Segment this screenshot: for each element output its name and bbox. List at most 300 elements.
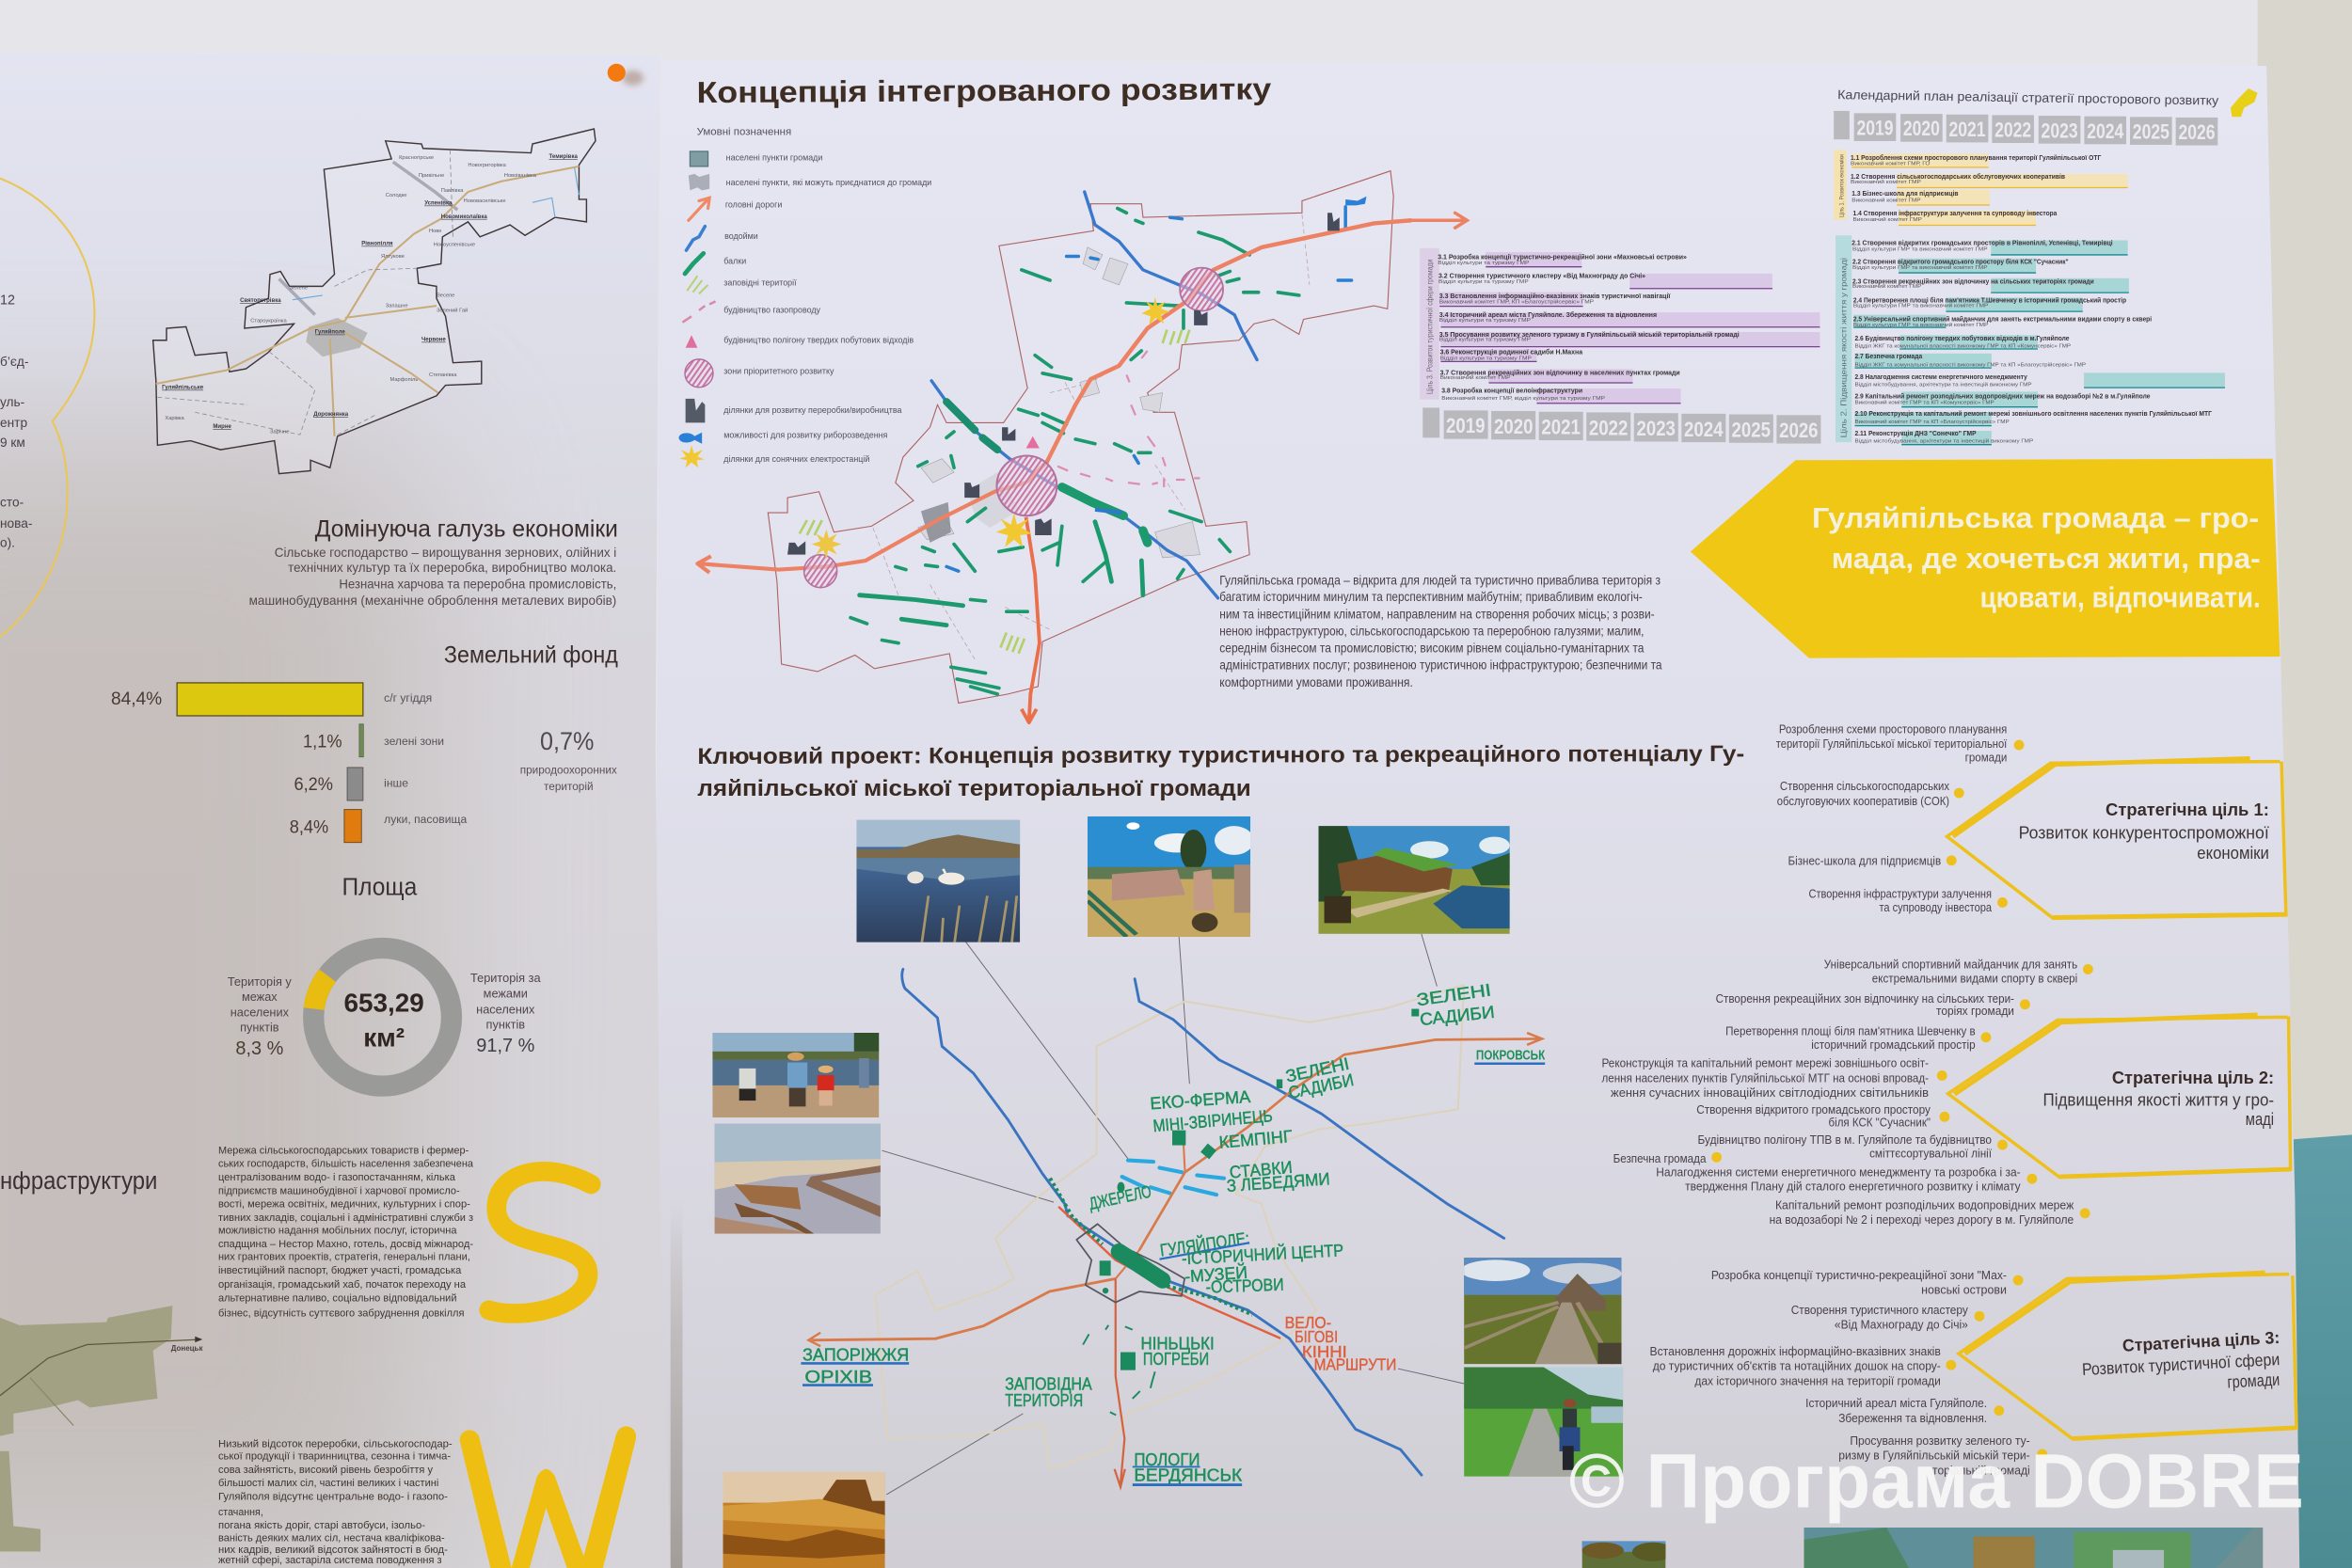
gantt chart: goals 1 and 2: Виконавчий комітет ГМР та КП «Благоустрійсервіс» ГМР xyxy=(1854,419,2010,425)
list: goal 3 projects: «Від Махнограду до Січі» xyxy=(1835,1319,1968,1332)
text block: territory outside settlements: пунктів xyxy=(486,1017,525,1031)
text block: dominant economy description: машинобудування (механічне оброблення металевих виробів) xyxy=(249,593,616,608)
gantt chart: goal 3 tourism: 3.4 Історичний ареал міста Гуляйполе. Збереження та відновлення xyxy=(1439,311,1657,319)
list: goal 1 projects: Бізнес-школа для підприємців xyxy=(1788,855,1942,868)
text block: weaknesses xyxy=(218,1439,453,1566)
text block: territory within settlements: 8,3 % xyxy=(235,1038,283,1059)
map: hand-drawn tourism sketch map: ЗАПОРІЖЖЯ xyxy=(803,1344,909,1364)
legend: map symbols: балки xyxy=(723,256,746,265)
gantt chart: goals 1 and 2 xyxy=(1834,111,2225,445)
photo: bench on a pier xyxy=(715,1123,881,1234)
gantt chart: goal 3 tourism: 2024 xyxy=(1684,418,1724,441)
gantt chart: goals 1 and 2: Відділ культури ГМР та виконавчий комітет ГМР xyxy=(1853,302,1988,309)
panel: left poster sheet xyxy=(0,261,671,1568)
gantt chart: goals 1 and 2: 2.10 Реконструкція та капітальний ремонт мережі зовнішнього освітлення населених пунктів Гуляйпільської МТГ xyxy=(1854,410,2212,418)
heading: land fund: Земельний фонд xyxy=(444,642,618,668)
heading: key project xyxy=(697,741,1744,801)
text block: strengths: можливістю надання мобільних послуг, історична xyxy=(218,1226,457,1237)
list: goal 2 projects: Перетворення площі біля пам'ятника Шевченку в xyxy=(1725,1024,1976,1037)
gantt chart: goal 3 tourism: Виконавчий комітет ГМР xyxy=(1440,374,1511,381)
letter S for strengths xyxy=(489,1171,591,1313)
map: hand-drawn tourism sketch map: ЕКО-ФЕРМА xyxy=(1150,1086,1251,1113)
list: goal 1 projects: громади xyxy=(1965,752,2007,765)
map: community districts and settlements: Павлівка xyxy=(441,188,464,194)
list: goal 2 projects: Універсальний спортивний майданчик для занять xyxy=(1824,958,2077,972)
gantt chart: goals 1 and 2: 1.2 Створення сільськогосподарських обслуговуючих кооперативів xyxy=(1851,173,2066,181)
list: goal 1 projects: Створення інфраструктури залучення xyxy=(1809,888,1992,901)
decorative yellow outline with profile text fragments xyxy=(0,179,94,637)
text block: dominant economy description: технічних культур та їх переробка, виробництво молока. xyxy=(288,560,616,575)
list: goal 3 projects: дах історичного значення на території громади xyxy=(1694,1375,1941,1388)
list: goal 3 projects: торіальній громаді xyxy=(1932,1465,2030,1478)
donut chart: area 653,29 km2: 653,29 xyxy=(344,989,424,1018)
gantt chart: goal 3 tourism: 2020 xyxy=(1494,415,1533,438)
panel: strategic goal 2 xyxy=(1948,1015,2291,1177)
bar chart: land fund: 8,4% xyxy=(290,817,328,837)
decorative yellow outline with profile text fragments: ентр xyxy=(0,416,27,430)
map: hand-drawn tourism sketch map: НІНЬЦЬКІ xyxy=(1141,1333,1215,1353)
map: hand-drawn tourism sketch map: З ЛЕБЕДЯМИ xyxy=(1226,1168,1330,1196)
map: community districts and settlements: Новоіванівка xyxy=(504,173,537,179)
gantt chart: goals 1 and 2: Відділ ЖКГ та комунальної власності виконкому ГМР та КП «Комунсервіс» ГМР xyxy=(1854,344,2071,350)
icon: yellow push pin xyxy=(2231,88,2258,117)
gantt chart: goal 3 tourism xyxy=(1420,248,1820,444)
decorative yellow outline with profile text fragments: о). xyxy=(0,536,15,550)
text block: strengths: спадщина – Нестор Махно, готель, досвід міжнарод- xyxy=(218,1239,473,1250)
text block: vision statement: ним та інвестиційним кліматом, направленим на створення робочих місць; з розви- xyxy=(1219,607,1655,621)
text block: vision statement: багатим історичним минулим та перспективним майбутнім; привабливим екологіч- xyxy=(1219,590,1643,604)
map: community districts and settlements: Новогригорівка xyxy=(468,163,507,168)
map: community districts and settlements: Красногірське xyxy=(399,155,434,161)
text block: strengths: бізнес, відсутність суттєвого забруднення довкілля xyxy=(218,1307,464,1319)
stat: protected territories: 0,7% xyxy=(540,726,594,755)
list: goal 1 projects xyxy=(1776,722,2024,914)
photo: cows at eco farm xyxy=(1088,816,1251,937)
text block: territory outside settlements: 91,7 % xyxy=(476,1036,534,1056)
panel: strategic goal 3: Стратегічна ціль 3: xyxy=(2122,1328,2280,1355)
text block: strengths: альтернативне паливо, соціально відповідальний xyxy=(218,1292,456,1304)
list: goal 2 projects: на водозаборі № 2 і переході через дорогу в м. Гуляйполе xyxy=(1770,1213,2074,1227)
legend: map symbols xyxy=(678,126,931,467)
list: goal 3 projects: новські острови xyxy=(1921,1283,2007,1296)
icon: orange push pin xyxy=(608,64,644,86)
map: hand-drawn tourism sketch map: СТАВКИ xyxy=(1229,1157,1293,1182)
gantt chart: goals 1 and 2: 2.11 Реконструкція ДНЗ "Сонечко" ГМР xyxy=(1854,430,1977,437)
arrow banner: community slogan: цювати, відпочивати. xyxy=(1980,582,2261,613)
map: community districts and settlements: Новоуспенівське xyxy=(434,242,475,247)
text block: dominant economy description: Незначна харчова та переробна промисловість, xyxy=(339,577,616,592)
text block: weaknesses: жетній сфері, застаріла система поводження з xyxy=(218,1555,442,1566)
legend: map symbols: можливості для розвитку риборозведення xyxy=(723,430,888,439)
gantt chart: goal 3 tourism: 2025 xyxy=(1732,418,1771,441)
map: community districts and settlements: Святопетрівка xyxy=(240,298,281,304)
legend: map symbols: населені пункти громади xyxy=(726,153,822,163)
list: goal 3 projects: Розробка концепції туристично-рекреаційної зони "Мах- xyxy=(1711,1269,2007,1282)
gantt chart: goals 1 and 2: 2026 xyxy=(2178,120,2216,144)
map: hand-drawn tourism sketch map: КІННІ xyxy=(1302,1342,1347,1361)
gantt chart: goals 1 and 2: 2.8 Налагодження системи енергетичного менеджменту xyxy=(1854,373,2027,381)
gantt chart: goals 1 and 2: 2.7 Безпечна громада xyxy=(1854,353,1923,360)
map: hand-drawn tourism sketch map: ПОГРЕБИ xyxy=(1143,1349,1209,1369)
gantt chart: goals 1 and 2: Відділ ЖКГ та комунальної власності виконкому ГМР та КП «Благоустрійсервіс» ГМР xyxy=(1854,362,2086,369)
list: goal 3 projects: Встановлення дорожніх інформаційно-вказівних знаків xyxy=(1650,1345,1941,1358)
gantt chart: goals 1 and 2: Виконавчий комітет ГМР xyxy=(1853,216,1922,223)
gantt chart: goals 1 and 2: 2024 xyxy=(2087,119,2124,143)
gantt chart: goal 3 tourism: Відділ культури та туризму ГМР xyxy=(1439,318,1531,324)
map: hand-drawn tourism sketch map: ОРІХІВ xyxy=(804,1367,872,1386)
stat: protected territories: територій xyxy=(544,781,594,793)
map: community districts and settlements: Харівка xyxy=(165,416,184,421)
list: goal 2 projects xyxy=(1601,958,2093,1227)
gantt chart: goal 3 tourism: 3.5 Просування розвитку зеленого туризму в Гуляйпільській міській територіальній громаді xyxy=(1439,331,1740,339)
map: community districts and settlements: Дорожнянка xyxy=(313,412,349,418)
map: hand-drawn tourism sketch map: МІНІ-ЗВІРИНЕЦЬ xyxy=(1152,1105,1273,1135)
text block: territory within settlements: пунктів xyxy=(240,1020,279,1034)
panel: strategic goal 2: Стратегічна ціль 2: xyxy=(2112,1069,2274,1087)
bar chart: land fund: інше xyxy=(384,777,408,790)
heading: calendar plan: Календарний план реалізації стратегії просторового розвитку xyxy=(1837,87,2218,108)
heading: infrastructure fragment: нфраструктури xyxy=(0,1168,157,1195)
map: community districts and settlements: Степанівка xyxy=(429,372,457,378)
gantt chart: goals 1 and 2: 2.5 Універсальний спортивний майданчик для занять екстремальними видами спорту в сквері xyxy=(1853,316,2152,324)
map: community districts and settlements: Ялтукове xyxy=(381,254,405,260)
text block: strengths: них грантових проектів, стратегія, генеральні плани, xyxy=(218,1251,470,1262)
panel: strategic goal 2: маді xyxy=(2246,1110,2274,1129)
map: hand-drawn tourism sketch map: САДИБИ xyxy=(1287,1069,1356,1102)
map: hand-drawn tourism sketch map: -ІСТОРИЧНИЙ ЦЕНТР xyxy=(1182,1240,1344,1268)
gantt chart: goals 1 and 2: 2021 xyxy=(1949,118,1986,141)
panel: centre poster sheet xyxy=(654,60,2299,1568)
gantt chart: goal 3 tourism: 3.2 Створення туристичного кластеру «Від Махнограду до Січі» xyxy=(1438,272,1645,279)
watermark: © Програма DOBRE xyxy=(1569,1438,2304,1524)
bar chart: land fund: зелені зони xyxy=(384,735,444,748)
decorative yellow outline with profile text fragments: 12 xyxy=(0,293,15,309)
list: goal 2 projects: Безпечна громада xyxy=(1613,1152,1707,1165)
map: hand-drawn tourism sketch map xyxy=(801,969,1545,1487)
list: goal 2 projects: Капітальний ремонт розподільчих водопровідних мереж xyxy=(1775,1198,2074,1212)
list: goal 3 projects: ризму в Гуляйпільській міській тери- xyxy=(1838,1449,2030,1463)
decorative yellow outline with profile text fragments: нова- xyxy=(0,516,32,531)
map: regional silhouette with Donetsk road: Донецьк xyxy=(171,1344,202,1353)
gantt chart: goals 1 and 2: Ціль 2. Підвищення якості життя у громаді xyxy=(1840,258,1849,437)
gantt chart: goal 3 tourism: 3.3 Встановлення інформаційно-вказівних знаків туристичної навігації xyxy=(1439,293,1671,300)
donut chart: area 653,29 km2: км² xyxy=(363,1022,405,1052)
gantt chart: goals 1 and 2: 2.6 Будівництво полігону твердих побутових відходів в м.Гуляйполе xyxy=(1854,335,2069,342)
bar chart: land fund: с/г угіддя xyxy=(384,691,432,705)
gantt chart: goals 1 and 2: 1.1 Розроблення схеми просторового планування території Гуляйпільської ОТГ xyxy=(1851,154,2101,162)
legend: map symbols: будівництво газопроводу xyxy=(723,305,821,314)
text block: vision statement: комфортними умовами проживання. xyxy=(1219,675,1413,689)
map: hand-drawn tourism sketch map: БЕРДЯНСЬК xyxy=(1134,1465,1242,1485)
gantt chart: goals 1 and 2: 2025 xyxy=(2133,120,2169,144)
panel: strategic goal 1: економіки xyxy=(2197,844,2269,863)
map: community districts and settlements: Марфопіль xyxy=(390,377,418,383)
photo: wooden cabin by a pond xyxy=(1319,826,1510,934)
text block: strengths: вості, мережа освітніх, медичних, культурних і спор- xyxy=(218,1199,470,1211)
panel: strategic goal 3: Розвиток туристичної сфери xyxy=(2082,1350,2280,1379)
donut chart: area 653,29 km2 xyxy=(313,948,452,1086)
text block: territory within settlements xyxy=(228,974,292,1059)
gantt chart: goals 1 and 2: Відділ культури ГМР та виконавчий комітет ГМР xyxy=(1852,246,1988,253)
text block: vision statement: адміністративних послуг; розвиненою туристичною інфраструктурою; безпечними та xyxy=(1219,658,1662,673)
legend: map symbols: будівництво полігону твердих побутових відходів xyxy=(723,336,914,345)
map: community districts and settlements: Рівнопілля xyxy=(361,242,393,247)
arrow banner: community slogan xyxy=(1691,459,2280,658)
gantt chart: goal 3 tourism: 3.8 Розробка концепції велоінфраструктури xyxy=(1441,388,1582,395)
map: integrated development concept xyxy=(697,171,1467,722)
text block: territory outside settlements: населених xyxy=(476,1002,535,1016)
text block: territory outside settlements xyxy=(470,971,541,1056)
gantt chart: goals 1 and 2: Відділ містобудування, архітектури та інвестицій виконкому ГМР xyxy=(1854,437,2033,444)
bar chart: land fund: луки, пасовища xyxy=(384,813,467,826)
map: community districts and settlements: Запашне xyxy=(386,304,408,309)
gantt chart: goal 3 tourism: Відділ культури та туризму ГМР xyxy=(1438,261,1530,266)
arrow banner: community slogan: Гуляйпільська громада – гро- xyxy=(1812,503,2259,534)
map: hand-drawn tourism sketch map: САДИБИ xyxy=(1419,1002,1496,1029)
gantt chart: goal 3 tourism: Виконавчий комітет ГМР, відділ культури та туризму ГМР xyxy=(1441,395,1605,402)
text block: territory within settlements: населених xyxy=(230,1006,290,1020)
map: community districts and settlements: Староукраїнка xyxy=(250,319,288,325)
text block: dominant economy description: Сільське господарство – вирощування зернових, олійних і xyxy=(275,545,616,560)
gantt chart: goals 1 and 2: Виконавчий комітет ГМР xyxy=(1852,283,1921,290)
gantt chart: goal 3 tourism: 3.1 Розробка концепції туристично-рекреаційної зони «Махновські острови» xyxy=(1438,253,1687,261)
photo: boardwalk with thatched hut xyxy=(1464,1258,1622,1364)
panel: strategic goal 2: Підвищення якості життя у гро- xyxy=(2043,1090,2274,1109)
gantt chart: goal 3 tourism: 2019 xyxy=(1446,414,1485,437)
text block: weaknesses: більшості малих сіл, частині великих і частині xyxy=(218,1478,438,1489)
text block: dominant economy description xyxy=(249,545,616,608)
bar chart: land fund xyxy=(111,683,467,843)
list: goal 3 projects: Створення туристичного кластеру xyxy=(1791,1304,1969,1317)
photo: children running on the embankment xyxy=(712,1033,879,1117)
map: community districts and settlements: Зелене xyxy=(290,286,308,292)
text block: territory outside settlements: межами xyxy=(484,987,528,1001)
list: goal 1 projects: Розроблення схеми просторового планування xyxy=(1779,722,2007,736)
gantt chart: goal 3 tourism: Відділ культури та туризму ГМР xyxy=(1438,279,1529,285)
panel: strategic goal 3: громади xyxy=(2227,1370,2280,1391)
text block: strengths xyxy=(218,1145,474,1319)
gantt chart: goals 1 and 2: Відділ культури ГМР та виконавчий комітет ГМР xyxy=(1853,322,1988,328)
text block: strengths: підприємств машинобудівної і харчової промисло- xyxy=(218,1185,460,1196)
list: goal 1 projects: та супроводу інвестора xyxy=(1879,901,1992,914)
gantt chart: goals 1 and 2: 2023 xyxy=(2042,119,2078,142)
list: goal 3 projects: Збереження та відновлення. xyxy=(1838,1412,1987,1425)
list: goal 2 projects: історичний громадський простір xyxy=(1811,1038,1976,1052)
map: community districts and settlements: Привільне xyxy=(419,173,444,179)
decorative yellow outline with profile text fragments: уль- xyxy=(0,395,24,409)
map: hand-drawn tourism sketch map: -ОСТРОВИ xyxy=(1205,1275,1284,1297)
photo: cyclist on a path xyxy=(1464,1368,1624,1477)
text block: weaknesses: ської продукції і тваринництва, сезонна і тимча- xyxy=(218,1450,451,1462)
list: goal 2 projects: Створення рекреаційних зон відпочинку на сільських тери- xyxy=(1716,992,2014,1006)
map: community districts and settlements: Червоне xyxy=(421,338,446,343)
gantt chart: goals 1 and 2: Виконавчий комітет ГМР та КП «Комунсервіс» ГМР xyxy=(1854,400,1994,405)
letter W for weaknesses xyxy=(460,1426,636,1568)
gantt chart: goal 3 tourism: Відділ культури та туризму ГМР xyxy=(1440,356,1532,361)
legend: map symbols: населені пункти, які можуть приєднатися до громади xyxy=(726,178,931,187)
legend: map symbols: головні дороги xyxy=(725,200,782,210)
text block: strengths: Мережа сільськогосподарських товариств і фермер- xyxy=(218,1145,469,1156)
map: hand-drawn tourism sketch map: ЗАПОВІДНА xyxy=(1005,1373,1092,1393)
gantt chart: goals 1 and 2: 2.4 Перетворення площі біля пам'ятника Т.Шевченку в історичний громадський простір xyxy=(1853,297,2127,305)
text block: weaknesses: ваність деяких малих сіл, нестача кваліфікова- xyxy=(218,1532,445,1544)
gantt chart: goal 3 tourism: Відділ культури та туризму ГМР xyxy=(1439,338,1531,343)
map: community districts and settlements xyxy=(153,129,596,474)
map: hand-drawn tourism sketch map: ТЕРИТОРІЯ xyxy=(1005,1390,1083,1410)
text block: territory within settlements: межах xyxy=(242,990,278,1004)
map: hand-drawn tourism sketch map: КЕМПІНГ xyxy=(1218,1126,1293,1152)
text block: vision statement: середнім бізнесом та промисловістю; високим рівнем соціально-гуманітарних та xyxy=(1219,641,1645,655)
bar chart: land fund: 6,2% xyxy=(294,775,333,795)
gantt chart: goal 3 tourism: 2026 xyxy=(1779,419,1819,442)
panel: strategic goal 1: Розвиток конкурентоспроможної xyxy=(2019,824,2269,843)
decorative yellow outline with profile text fragments: б’єд- xyxy=(0,355,28,369)
gantt chart: goals 1 and 2: 2.1 Створення відкритих громадських просторів в Рівнопіллі, Успенівці, Темирівці xyxy=(1851,240,2113,247)
gantt chart: goal 3 tourism: Ціль 3. Розвиток туристичної сфери громади xyxy=(1426,260,1435,394)
gantt chart: goals 1 and 2: 2.9 Капітальний ремонт розподільчих водопровідних мереж на водозаборі №2 в м.Гуляйполе xyxy=(1854,392,2151,400)
text block: strengths: інвестиційний паспорт, бюджет участі, громадська xyxy=(218,1265,462,1276)
bar chart: land fund: 1,1% xyxy=(303,732,342,752)
text block: territory within settlements: Територія у xyxy=(228,974,292,989)
map: community districts and settlements: Темирівка xyxy=(549,154,579,160)
title: integrated development concept: Концепція інтегрованого розвитку xyxy=(696,71,1272,109)
gantt chart: goals 1 and 2: Виконавчий комітет ГМР xyxy=(1851,198,1921,204)
text block: vision statement: неною інфраструктурою, сільськогосподарською та переробною галузями; малим, xyxy=(1219,625,1644,639)
bar chart: land fund: 84,4% xyxy=(111,689,162,709)
map: community districts and settlements: Гуляйпільське xyxy=(162,385,204,391)
map: hand-drawn tourism sketch map: ЗЕЛЕНІ xyxy=(1415,979,1492,1009)
heading: key project: Ключовий проект: Концепція розвитку туристичного та рекреаційного потенціалу Гу- xyxy=(697,741,1744,769)
list: goal 2 projects: Налагодження системи енергетичного менеджменту та розробка і за- xyxy=(1656,1166,2021,1180)
text block: weaknesses: Гуляйполя відсутнє центральне водо- і газопо- xyxy=(218,1491,448,1502)
map: community districts and settlements: Веселе xyxy=(437,293,454,299)
stat: protected territories: природоохоронних xyxy=(520,764,617,776)
map: community districts and settlements: Нове xyxy=(429,229,441,234)
list: goal 2 projects: ження сучасних інноваційних світлодіодних світильників xyxy=(1611,1086,1929,1100)
list: goal 2 projects: Створення відкритого громадського простору xyxy=(1696,1103,1931,1117)
map: community districts and settlements: Нововасилівське xyxy=(464,198,506,204)
legend: map symbols: зони пріоритетного розвитку xyxy=(723,367,834,376)
map: hand-drawn tourism sketch map: ВЕЛО- xyxy=(1285,1313,1331,1332)
list: goal 2 projects: Будівництво полігону ТПВ в м. Гуляйполе та будівництво xyxy=(1698,1133,1992,1147)
map: community districts and settlements: Успенівка xyxy=(424,201,453,207)
gantt chart: goals 1 and 2: 2019 xyxy=(1856,116,1894,139)
list: goal 2 projects: твердження Плану дій сталого енергетичного розвитку і клімату xyxy=(1685,1180,2021,1193)
heading: dominant economy: Домінуюча галузь економіки xyxy=(315,517,618,543)
gantt chart: goal 3 tourism: 3.6 Реконструкція родинної садиби Н.Махна xyxy=(1440,349,1583,356)
map: community districts and settlements: Новомиколаївка xyxy=(441,214,487,220)
text block: territory outside settlements: Територія за xyxy=(470,971,541,985)
text block: weaknesses: Низький відсоток переробки, сільськогосподар- xyxy=(218,1439,453,1450)
map: hand-drawn tourism sketch map: ЗЕЛЕНІ xyxy=(1283,1053,1351,1086)
panel: strategic goal 1: Стратегічна ціль 1: xyxy=(2106,800,2269,819)
gantt chart: goal 3 tourism: 2021 xyxy=(1541,416,1581,439)
text block: strengths: організація, громадський хаб, початок переходу на xyxy=(218,1279,467,1291)
map: community districts and settlements: Мирне xyxy=(213,424,232,430)
list: goal 2 projects: біля КСК "Сучасник" xyxy=(1829,1117,1931,1130)
decorative yellow outline with profile text fragments: сто- xyxy=(0,496,24,510)
list: goal 2 projects: сміттєсортувальної лінії xyxy=(1869,1147,1993,1160)
list: goal 2 projects: екстремальними видами спорту в сквері xyxy=(1872,973,2077,986)
list: goal 1 projects: території Гуляйпільської міської територіальної xyxy=(1776,737,2008,751)
gantt chart: goals 1 and 2: Відділ культури ГМР та виконавчий комітет ГМР xyxy=(1852,264,1988,271)
map: community districts and settlements: Солодке xyxy=(386,193,406,198)
gantt chart: goals 1 and 2: Ціль 1. Розвиток економіки xyxy=(1838,154,1846,217)
map: hand-drawn tourism sketch map: ПОКРОВСЬК xyxy=(1476,1049,1545,1064)
gantt chart: goal 3 tourism: 2023 xyxy=(1636,417,1676,440)
legend: map symbols: водойми xyxy=(724,231,758,241)
list: goal 3 projects xyxy=(1650,1269,2047,1478)
gantt chart: goal 3 tourism: Виконавчий комітет ГМР, КП «Благоустрійсервіс» ГМР xyxy=(1439,299,1594,306)
gantt chart: goals 1 and 2: Виконавчий комітет ГМР, ГО xyxy=(1851,160,1931,166)
decorative yellow outline with profile text fragments: 9 км xyxy=(0,436,25,450)
heading: key project: ляйпільської міської територіальної громади xyxy=(697,776,1251,801)
photo connector lines xyxy=(882,934,1464,1495)
gantt chart: goals 1 and 2: 1.3 Бізнес-школа для підприємців xyxy=(1851,190,1959,198)
map: hand-drawn tourism sketch map: -МУЗЕЙ xyxy=(1184,1262,1248,1286)
text block: weaknesses: стачання, xyxy=(218,1507,263,1518)
list: goal 2 projects: торіях громади xyxy=(1936,1005,2014,1018)
text block: strengths: тивних закладів, соціальні і адміністративні служби з xyxy=(218,1212,473,1224)
map: community districts and settlements: Зарічне xyxy=(270,430,289,436)
map: community districts and settlements: Зелений Гай xyxy=(437,307,468,313)
panel: strategic goal 1 xyxy=(1947,758,2286,918)
text block: vision statement: Гуляйпільська громада – відкрита для людей та туристично приваблива територія з xyxy=(1219,574,1661,588)
list: goal 1 projects: обслуговуючих кооперативів (СОК) xyxy=(1777,795,1949,808)
map: hand-drawn tourism sketch map: МАРШРУТИ xyxy=(1314,1355,1396,1374)
list: goal 3 projects: Просування розвитку зеленого ту- xyxy=(1850,1434,2030,1448)
gantt chart: goals 1 and 2: 2.3 Створення рекреаційних зон відпочинку на сільських територіях громади xyxy=(1852,278,2094,286)
map: regional silhouette with Donetsk road xyxy=(0,1306,202,1551)
legend: map symbols: ділянки для сонячних електростанцій xyxy=(723,454,869,464)
text block: weaknesses: них кадрів, великий відсоток зайнятості в бюд- xyxy=(218,1544,448,1556)
arrow banner: community slogan: мада, де хочеться жити, пра- xyxy=(1832,544,2261,575)
gantt chart: goals 1 and 2: 2022 xyxy=(1994,119,2031,142)
text block: vision statement xyxy=(1219,574,1662,689)
map: hand-drawn tourism sketch map: ГУЛЯЙПОЛЕ: xyxy=(1159,1227,1250,1259)
text block: weaknesses: погана якість доріг, старі автобуси, ізольо- xyxy=(218,1520,425,1531)
panel: strategic goal 3 xyxy=(1959,1273,2296,1438)
legend: map symbols: Умовні позначення xyxy=(697,126,791,137)
legend: map symbols: ділянки для розвитку переробки/виробництва xyxy=(723,405,902,415)
stat: protected territories xyxy=(520,726,617,793)
gantt chart: goals 1 and 2: Виконавчий комітет ГМР xyxy=(1851,179,1921,185)
photo strip: bottom aerial views xyxy=(1804,1528,2264,1568)
list: goal 3 projects: Історичний ареал міста Гуляйполе. xyxy=(1805,1397,1987,1410)
text block: strengths: ських господарств, більшість населення забезпечена xyxy=(218,1159,474,1170)
list: goal 1 projects: Створення сільськогосподарських xyxy=(1780,780,1950,793)
text block: strengths: централізованим водо- і газопостачанням, кілька xyxy=(218,1172,455,1183)
list: goal 2 projects: Реконструкція та капітальний ремонт мережі зовнішнього освіт- xyxy=(1601,1057,1929,1070)
photo: swans on a lake xyxy=(856,820,1020,942)
gantt chart: goal 3 tourism: 2022 xyxy=(1589,416,1628,439)
legend: map symbols: заповідні території xyxy=(723,278,797,288)
list: goal 2 projects: лення населених пунктів Гуляйпільської МТГ на основі впровад- xyxy=(1601,1072,1929,1085)
map: hand-drawn tourism sketch map: ДЖЕРЕЛО xyxy=(1088,1181,1152,1213)
gantt chart: goals 1 and 2: 2020 xyxy=(1903,117,1940,140)
gantt chart: goals 1 and 2: Відділ містобудування, архітектури та інвестицій виконкому ГМР xyxy=(1854,381,2032,388)
gantt chart: goal 3 tourism: 3.7 Створення рекреаційних зон відпочинку в населених пунктах громади xyxy=(1440,369,1680,376)
gantt chart: goals 1 and 2: 2.2 Створення відкритого громадського простору біля КСК "Сучасник" xyxy=(1852,259,2069,266)
heading: area: Площа xyxy=(342,874,418,900)
map: community districts and settlements: Гуляйполе xyxy=(315,329,345,336)
list: goal 3 projects: до туристичних об'єктів та нотаційних дошок на спору- xyxy=(1653,1360,1941,1373)
map: hand-drawn tourism sketch map: ПОЛОГИ xyxy=(1134,1449,1200,1469)
photo: dunes at sunset xyxy=(723,1472,885,1568)
map: hand-drawn tourism sketch map: БІГОВІ xyxy=(1295,1327,1338,1346)
text block: weaknesses: сова зайнятість, високий рівень безробіття у xyxy=(218,1465,433,1476)
gantt chart: goals 1 and 2: 1.4 Створення інфраструктури залучення та супроводу інвестора xyxy=(1853,210,2058,217)
